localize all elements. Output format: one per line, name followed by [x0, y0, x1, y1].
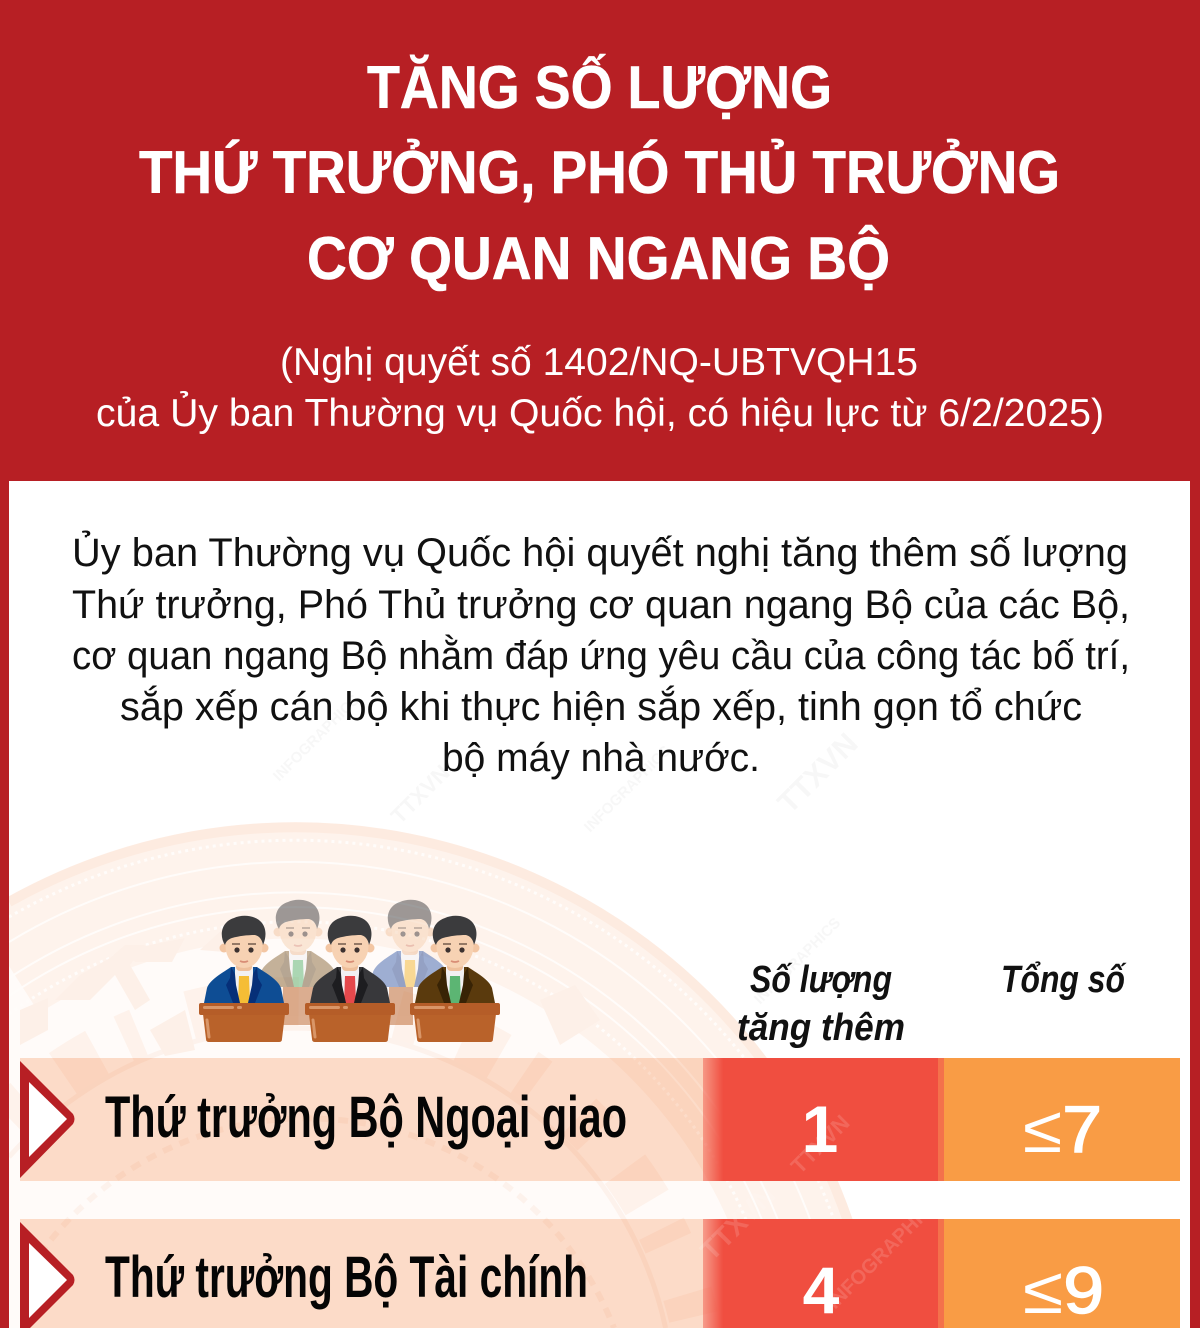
cell watermarks: TTXVN — [786, 1110, 855, 1179]
row: Foreign Affairs — [20, 1058, 1180, 1181]
intro paragraph: bộ máy nhà nước. — [442, 736, 760, 780]
total cell: ≤7 — [1023, 1092, 1102, 1166]
column header: additional number — [737, 959, 905, 1049]
front row officials — [199, 916, 500, 1042]
icon: officials behind desks — [199, 900, 500, 1042]
row label: Thứ trưởng Bộ Tài chính — [105, 1245, 588, 1310]
watermarks: INFOGRAPHICS — [581, 742, 674, 836]
total cell — [944, 1219, 1180, 1328]
additional cell: 4 — [803, 1253, 840, 1327]
title: CƠ QUAN NGANG BỘ — [307, 225, 890, 292]
title — [139, 54, 1060, 292]
subtitle: legal reference: (Nghị quyết số 1402/NQ-UBTVQH15 — [280, 341, 918, 384]
subtitle: legal reference — [96, 341, 1104, 435]
intro paragraph: Ủy ban Thường vụ Quốc hội quyết nghị tăng thêm số lượng — [72, 529, 1128, 575]
intro paragraph: cơ quan ngang Bộ nhằm đáp ứng yêu cầu của công tác bố trí, — [72, 633, 1130, 678]
title: TĂNG SỐ LƯỢNG — [367, 54, 832, 121]
watermarks: INFOGRAPHICS — [751, 914, 844, 1008]
additional cell — [703, 1058, 940, 1181]
white content panel — [9, 481, 1190, 1328]
cell watermarks — [694, 1110, 947, 1314]
row backgrounds — [20, 1058, 722, 1328]
watermarks: INFOGRAPHICS — [270, 691, 363, 785]
watermarks: TTXVN — [386, 760, 455, 829]
additional cell — [703, 1219, 940, 1328]
additional cell: 1 — [802, 1092, 838, 1166]
arrow marker — [20, 1061, 74, 1178]
intro paragraph: Thứ trưởng, Phó Thủ trưởng cơ quan ngang Bộ của các Bộ, — [72, 583, 1130, 627]
background emblem — [9, 822, 879, 1328]
title: THỨ TRƯỞNG, PHÓ THỦ TRƯỞNG — [139, 139, 1060, 206]
total cell — [944, 1058, 1180, 1181]
row label: Thứ trưởng Bộ Ngoại giao — [105, 1085, 627, 1150]
intro paragraph: sắp xếp cán bộ khi thực hiện sắp xếp, tinh gọn tổ chức — [120, 684, 1082, 729]
divider strip — [938, 1219, 944, 1328]
column header: additional number: Số lượng — [750, 959, 892, 1001]
column header: additional number: tăng thêm — [737, 1007, 905, 1049]
total cell: ≤9 — [1023, 1253, 1104, 1327]
divider strip — [938, 1058, 944, 1181]
watermarks: TTXVN — [772, 727, 864, 820]
watermarks — [270, 691, 864, 1008]
cell watermarks: TTXVN — [694, 1179, 781, 1266]
emblem figure shapes — [20, 944, 594, 1056]
subtitle: legal reference: của Ủy ban Thường vụ Quốc hội, có hiệu lực từ 6/2/2025) — [96, 391, 1104, 435]
back row officials — [258, 900, 450, 1025]
intro paragraph — [72, 529, 1130, 780]
column header: total: Tổng số — [1001, 959, 1126, 1001]
cell watermarks: INFOGRAPHICS — [823, 1190, 947, 1314]
row: Finance — [20, 1219, 1180, 1328]
arrow marker — [20, 1222, 74, 1328]
